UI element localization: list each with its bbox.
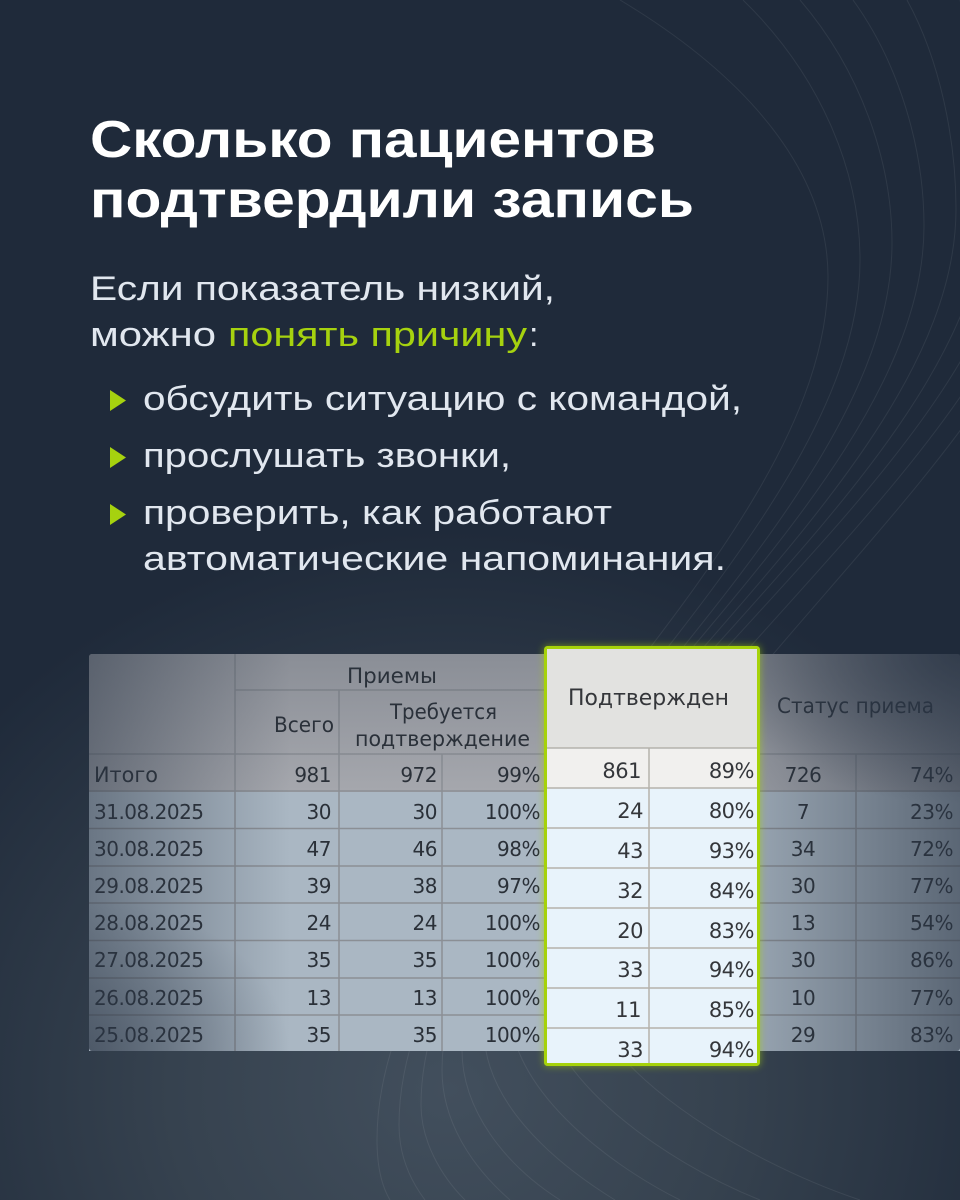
row: 30.08: 46: [413, 837, 437, 861]
row: 30.08: 30.08.2025: [94, 837, 204, 861]
column values: 84%: [709, 879, 754, 903]
data table: [89, 654, 960, 1051]
row: 30.08: 34: [791, 837, 815, 861]
column values: 861: [602, 759, 641, 783]
row: 26.08: 100%: [485, 986, 540, 1010]
row: 25.08: 100%: [485, 1023, 540, 1047]
table header: Требуется: [389, 700, 497, 724]
row: 29.08: 97%: [497, 874, 540, 898]
column values: 89%: [709, 759, 754, 783]
row: 31.08: 100%: [485, 800, 540, 824]
column values: 24: [617, 799, 643, 823]
row: 25.08: 35: [413, 1023, 437, 1047]
column values: 32: [617, 879, 643, 903]
row: 25.08: 29: [791, 1023, 815, 1047]
title: Сколько пациентов: [90, 111, 656, 169]
row: 25.08: 25.08.2025: [94, 1023, 204, 1047]
column values: 80%: [709, 799, 754, 823]
intro text: [90, 270, 555, 354]
row: 28.08: 54%: [910, 911, 953, 935]
row: 31.08: 31.08.2025: [94, 800, 204, 824]
row: 29.08: 30: [791, 874, 815, 898]
column values: 43: [617, 839, 643, 863]
row: 27.08: [94, 948, 953, 972]
row: 26.08: 13: [413, 986, 437, 1010]
bullet 2: прослушать звонки,: [143, 437, 511, 475]
column values: 93%: [709, 839, 754, 863]
row: 28.08: [94, 911, 953, 935]
intro text: понять причину: [228, 316, 527, 354]
row: 28.08: 13: [791, 911, 815, 935]
column values: [602, 759, 754, 1062]
row: 27.08: 86%: [910, 948, 953, 972]
column values: 83%: [709, 919, 754, 943]
row: 26.08: [94, 986, 953, 1010]
column values: 33: [617, 958, 643, 982]
row: 28.08: 24: [413, 911, 437, 935]
row: total: Итого: [94, 763, 158, 787]
column values: 94%: [709, 958, 754, 982]
column values: 33: [617, 1038, 643, 1062]
row: 26.08: 77%: [910, 986, 953, 1010]
row: 31.08: 7: [797, 800, 809, 824]
column values: 85%: [709, 998, 754, 1022]
row: 29.08: 39: [307, 874, 331, 898]
bullet 3: [110, 494, 726, 578]
intro text: можно: [90, 316, 216, 354]
bullet list: [110, 380, 742, 578]
row: total: 726: [785, 763, 821, 787]
row: 31.08: 30: [307, 800, 331, 824]
table header: Приемы: [347, 664, 437, 688]
bullet 1: обсудить ситуацию с командой,: [143, 380, 742, 418]
row: total: 972: [400, 763, 437, 787]
row: 27.08: 35: [307, 948, 331, 972]
title: подтвердили запись: [90, 171, 694, 229]
table header: [274, 664, 934, 751]
row: 28.08: 24: [307, 911, 331, 935]
bullet 3: проверить, как работают: [143, 494, 612, 532]
intro text: :: [529, 316, 538, 354]
row: 28.08: 100%: [485, 911, 540, 935]
row: 29.08: 38: [413, 874, 437, 898]
row: 30.08: 47: [307, 837, 331, 861]
row: 31.08: 23%: [910, 800, 953, 824]
row: 29.08: 77%: [910, 874, 953, 898]
table header: Статус приема: [777, 694, 934, 718]
row: 27.08: 30: [791, 948, 815, 972]
row: total: [94, 763, 953, 787]
column values: 11: [615, 998, 641, 1022]
table vignette: [89, 654, 960, 1051]
intro text: Если показатель низкий,: [90, 270, 555, 308]
table header: подтверждение: [355, 727, 530, 751]
column values: 94%: [709, 1038, 754, 1062]
bullet 3: автоматические напоминания.: [143, 540, 726, 578]
row: 30.08: 72%: [910, 837, 953, 861]
row: 25.08: 83%: [910, 1023, 953, 1047]
row: 31.08: 30: [413, 800, 437, 824]
column values: 20: [617, 919, 643, 943]
row: 27.08: 100%: [485, 948, 540, 972]
row: 30.08: [94, 837, 953, 861]
row: total: 981: [294, 763, 331, 787]
column header: Подтвержден: [568, 686, 729, 711]
row: 30.08: 98%: [497, 837, 540, 861]
row: 25.08: 35: [307, 1023, 331, 1047]
table header: Всего: [274, 713, 334, 737]
row: 28.08: 28.08.2025: [94, 911, 204, 935]
row: total: 99%: [497, 763, 540, 787]
highlighted column: Подтвержден: [544, 646, 760, 1066]
row: 29.08: [94, 874, 953, 898]
row: 27.08: 35: [413, 948, 437, 972]
row: 29.08: 29.08.2025: [94, 874, 204, 898]
row: 26.08: 10: [791, 986, 815, 1010]
row: 26.08: 26.08.2025: [94, 986, 204, 1010]
table background: [89, 654, 960, 1051]
title: [90, 111, 694, 229]
row: 31.08: [94, 800, 953, 824]
row: 25.08: [94, 1023, 953, 1047]
row: 27.08: 27.08.2025: [94, 948, 204, 972]
row: 26.08: 13: [307, 986, 331, 1010]
row: total: 74%: [910, 763, 953, 787]
